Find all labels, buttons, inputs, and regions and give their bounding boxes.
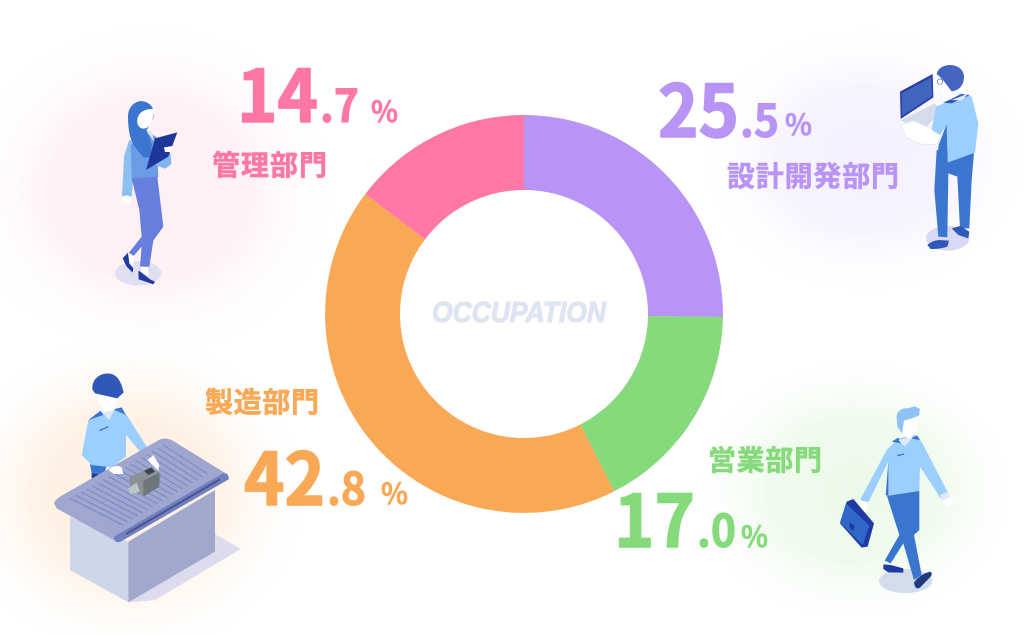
value .7: .7 [320, 70, 359, 135]
percent sign: % [785, 102, 812, 144]
donut chart [325, 115, 723, 513]
segment: management 14.7% [365, 115, 524, 239]
stat: sales [614, 439, 822, 568]
background glow: purple [695, 20, 1028, 300]
value 25: 25 [658, 53, 739, 158]
department name: 管理部門 [212, 144, 327, 184]
value 42: 42 [244, 421, 325, 526]
background glow: orange [0, 325, 315, 635]
value .8: .8 [327, 453, 366, 518]
stat: design development [658, 53, 899, 195]
icon: woman with clipboard [115, 101, 177, 286]
icon: man walking with briefcase [840, 406, 953, 593]
value 17: 17 [614, 463, 695, 568]
segment: design development 25.5% [524, 115, 723, 317]
percent sign: % [741, 514, 768, 556]
value 14: 14 [237, 38, 318, 143]
segment: manufacturing 42.8% [325, 194, 614, 513]
background glow: pink [0, 15, 345, 365]
percent sign: % [381, 471, 408, 513]
value .0: .0 [697, 495, 736, 560]
icon: man with laptop [900, 65, 978, 251]
percent sign: % [371, 89, 398, 131]
department name: 製造部門 [205, 381, 319, 421]
department name: 営業部門 [708, 439, 822, 479]
background glow: green [680, 345, 1028, 635]
stat: management [212, 38, 398, 184]
value .5: .5 [740, 85, 779, 150]
icon: worker at conveyor [54, 373, 241, 602]
department name: 設計開発部門 [727, 155, 899, 195]
segment: sales 17.0% [580, 316, 723, 491]
stat: manufacturing [205, 381, 408, 526]
center label: OCCUPATION [432, 297, 607, 329]
